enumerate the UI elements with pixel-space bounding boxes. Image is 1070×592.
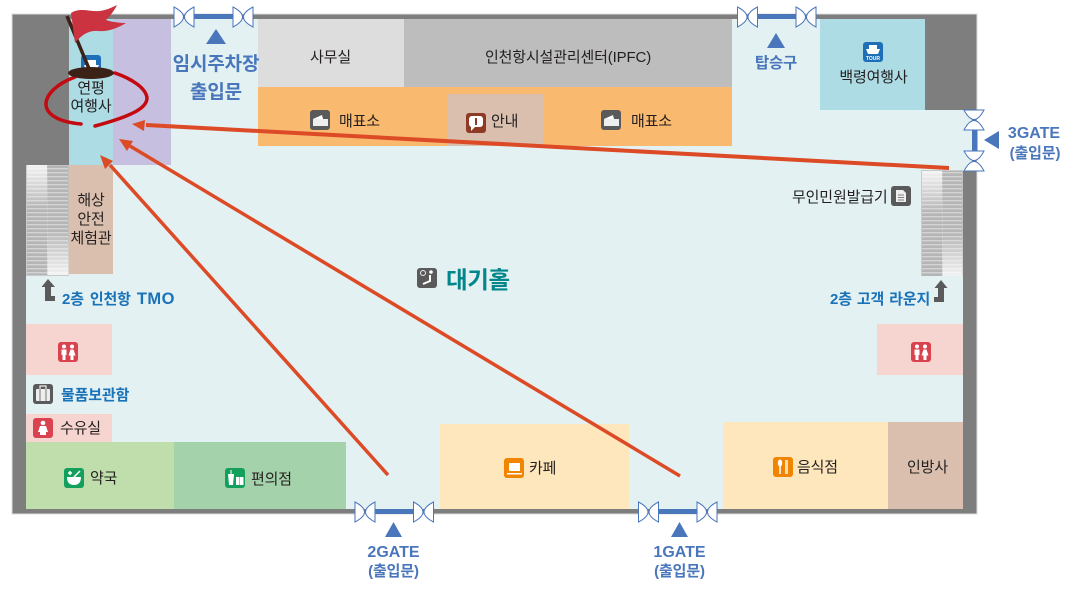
arrow: from gate 3: [132, 120, 949, 168]
panel: Incheon ferry company: [888, 422, 963, 509]
arrow: from gate 2: [100, 155, 388, 475]
panel: Baengnyeong travel agency: [820, 19, 925, 110]
gate 3: [964, 110, 1060, 171]
Yeonpyeong icon and label: 여행사: [71, 98, 112, 115]
panel: maritime safety hall: [69, 165, 113, 274]
panel: Incheon ferry company: 인방사: [907, 459, 948, 476]
panel: IPFC: [404, 19, 732, 87]
kiosk label: 무인민원발급기: [792, 189, 888, 206]
right escalators: [921, 170, 963, 276]
panel: convenience store: [174, 442, 346, 509]
boarding gate: 탑승구: [755, 54, 797, 72]
2F TMO label: [42, 279, 175, 308]
panel: restaurant: [723, 422, 888, 509]
gate 2: (출입문): [368, 563, 419, 580]
hand-drawn red circle: [46, 73, 147, 126]
waiting hall label: [417, 267, 510, 293]
panel: cafe: 카페: [529, 460, 556, 477]
gate 1: (출입문): [654, 563, 705, 580]
gate 2: 2GATE: [367, 544, 420, 561]
waiting hall label: 대기홀: [446, 267, 510, 293]
flag marker: [67, 5, 126, 79]
panel: office: 사무실: [310, 49, 351, 66]
panel: Baengnyeong travel agency: 백령여행사: [839, 69, 908, 86]
gate 2: [355, 502, 434, 580]
panel: information: [447, 94, 543, 146]
panel: convenience store: 편의점: [251, 471, 292, 488]
waiting hall floor: [26, 19, 972, 509]
panel: maritime safety hall: 해상: [77, 192, 105, 209]
boarding gate: [738, 7, 816, 72]
parking gate: 임시주차장: [173, 53, 259, 75]
Yeonpyeong icon and label: 연평: [77, 80, 105, 97]
panel: maritime safety hall: 안전: [77, 211, 105, 228]
panel: nursing room: 수유실: [60, 420, 101, 437]
gate 1: [638, 502, 717, 580]
luggage storage: [33, 384, 130, 404]
luggage storage: 물품보관함: [61, 387, 130, 404]
parking gate: 출입문: [190, 81, 242, 103]
panel: purple room: [113, 19, 171, 165]
panel: pharmacy: 약국: [90, 470, 118, 487]
gate 3: 3GATE: [1008, 125, 1060, 142]
panel: cafe: [440, 424, 629, 509]
icon: ticket left: [310, 110, 330, 130]
2F lounge label: [830, 280, 948, 308]
panel: restaurant: 음식점: [797, 459, 838, 476]
panel: Yeonpyeong travel agency: [69, 19, 113, 165]
panel: ticket office band: [258, 87, 732, 146]
kiosk label: [792, 186, 911, 206]
panel: information: 안내: [491, 113, 518, 130]
ticket office label left: 매표소: [339, 113, 380, 130]
panel: restroom left: [26, 324, 112, 375]
panel: nursing room: [26, 414, 112, 442]
gate 3: (출입문): [1010, 145, 1060, 162]
panel: restroom right: [877, 324, 963, 375]
panel: maritime safety hall: 체험관: [71, 230, 112, 247]
2F TMO label: 2층 인천항 TMO: [62, 290, 175, 308]
panel: IPFC: 인천항시설관리센터(IPFC): [485, 49, 651, 66]
left escalators: [26, 165, 69, 276]
panel: pharmacy: [26, 442, 174, 509]
Yeonpyeong icon and label: [71, 55, 112, 115]
ticket office label right: 매표소: [631, 113, 672, 130]
2F lounge label: 2층 고객 라운지: [830, 291, 930, 308]
building outer wall: [12, 14, 977, 514]
gate 1: 1GATE: [653, 544, 706, 561]
arrow: from gate 1: [119, 139, 680, 476]
icon: ticket right: [601, 110, 621, 130]
parking gate: [173, 7, 259, 103]
panel: office: [258, 19, 404, 87]
panel: Baengnyeong travel agency: TOUR: [866, 56, 880, 62]
